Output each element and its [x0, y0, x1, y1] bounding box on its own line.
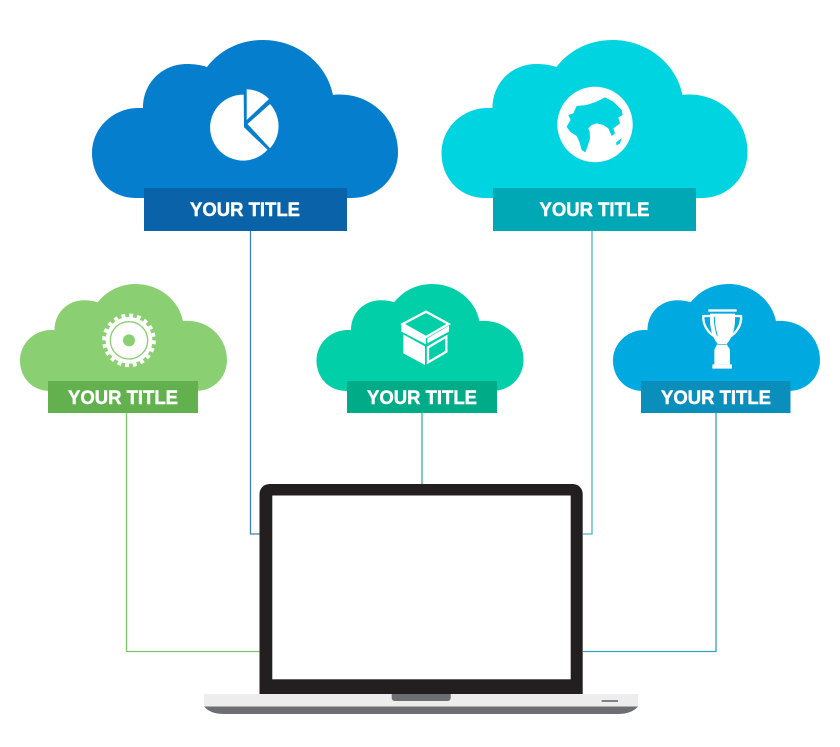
cloud shape	[92, 40, 398, 198]
title text: YOUR TITLE	[661, 387, 771, 409]
laptop	[204, 484, 638, 714]
icon: trophy	[703, 309, 741, 369]
connector: blue cloud to laptop	[250, 231, 260, 534]
laptop screen bezel	[260, 484, 583, 694]
title text: YOUR TITLE	[540, 199, 650, 221]
title bar	[347, 381, 497, 413]
panel: cyan cloud	[442, 40, 748, 231]
icon: pie chart	[210, 89, 279, 161]
cloud shape	[316, 284, 524, 391]
laptop screen	[272, 496, 571, 679]
connector: green cloud to laptop	[126, 413, 260, 652]
panel: sky blue cloud	[613, 284, 820, 413]
connector: cyan cloud to laptop	[583, 231, 592, 534]
icon: gear	[104, 316, 154, 365]
connector: sky cloud to laptop	[583, 413, 716, 652]
title text: YOUR TITLE	[68, 387, 178, 409]
title text: YOUR TITLE	[190, 199, 300, 221]
title text: YOUR TITLE	[367, 387, 477, 409]
panel: blue cloud	[92, 40, 398, 231]
icon: globe	[557, 87, 633, 162]
title bar	[144, 188, 347, 231]
panel: teal cloud	[316, 284, 524, 413]
cloud shape	[20, 284, 227, 391]
laptop hinge notch	[392, 694, 451, 701]
connector: teal cloud to laptop	[421, 413, 423, 484]
panel: green cloud	[20, 284, 227, 413]
laptop slot	[602, 700, 618, 702]
cloud shape	[442, 40, 748, 198]
title bar	[48, 381, 198, 413]
laptop base	[204, 694, 638, 707]
icon: box	[401, 312, 449, 365]
laptop base underside	[204, 706, 638, 714]
title bar	[493, 188, 696, 231]
cloud shape	[613, 284, 820, 391]
title bar	[641, 381, 790, 413]
